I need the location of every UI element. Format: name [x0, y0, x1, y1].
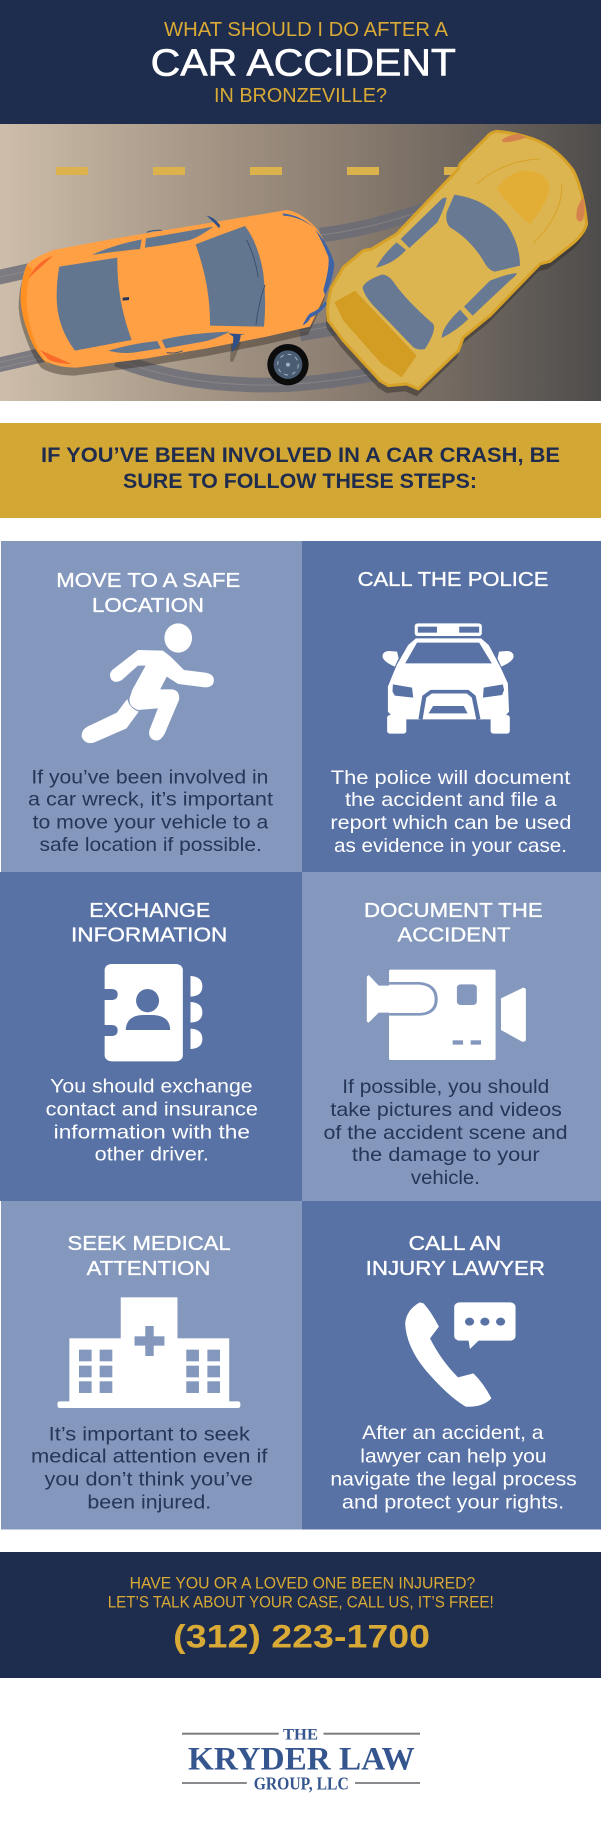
text: document the accident: If possible, you should: [342, 1076, 549, 1098]
text: exchange information: other driver.: [95, 1143, 209, 1165]
text: exchange information: contact and insurance: [46, 1098, 258, 1120]
text: document the accident: [324, 1076, 568, 1189]
panel: call an injury lawyer: [302, 1201, 601, 1530]
text: move to a safe location: a car wreck, it’s important: [28, 788, 274, 810]
text: call the police: report which can be used: [330, 812, 571, 834]
heading: document the accident: DOCUMENT THE: [364, 899, 543, 922]
banner: follow these steps: IF YOU’VE BEEN INVOLVED IN A CAR CRASH, BE: [41, 444, 560, 467]
text: call an injury lawyer: [330, 1422, 577, 1513]
text: seek medical attention: [31, 1423, 268, 1513]
banner: follow these steps: SURE TO FOLLOW THESE STEPS:: [123, 470, 477, 493]
heading: document the accident: [364, 899, 543, 947]
call to action text: HAVE YOU OR A LOVED ONE BEEN INJURED?: [130, 1575, 475, 1593]
heading: exchange information: INFORMATION: [71, 924, 227, 947]
call to action panel: [0, 1552, 601, 1678]
header panel: [0, 0, 601, 124]
heading: seek medical attention: SEEK MEDICAL: [68, 1232, 231, 1255]
heading: call an injury lawyer: INJURY LAWYER: [366, 1257, 545, 1280]
logo: the kryder law group: THE: [283, 1727, 318, 1744]
text: seek medical attention: been injured.: [87, 1491, 211, 1513]
heading: move to a safe location: MOVE TO A SAFE: [56, 569, 240, 592]
text: exchange information: information with the: [54, 1121, 250, 1143]
phone number: (312) 223-1700: [173, 1618, 430, 1654]
title: WHAT SHOULD I DO AFTER A: [164, 19, 449, 41]
text: seek medical attention: you don’t think you’ve: [44, 1468, 253, 1490]
text: exchange information: You should exchange: [50, 1075, 253, 1097]
panel: move to a safe location: [1, 541, 302, 872]
logo: the kryder law group: [182, 1727, 420, 1793]
icon: video camera: [367, 970, 526, 1060]
logo: the kryder law group: KRYDER LAW: [188, 1741, 415, 1777]
icon: contact book: [103, 964, 202, 1061]
icon: hospital: [57, 1297, 240, 1408]
text: call the police: the accident and file a: [345, 789, 557, 811]
panel: exchange information: [0, 872, 302, 1201]
panel: document the accident: [302, 872, 601, 1201]
text: move to a safe location: [28, 766, 274, 856]
heading: call an injury lawyer: [366, 1232, 545, 1280]
skid marks: [0, 208, 430, 385]
hero illustration: car crash: [0, 124, 601, 401]
text: document the accident: the damage to your: [352, 1144, 540, 1166]
heading: seek medical attention: [68, 1232, 231, 1280]
text: call an injury lawyer: navigate the legal process: [330, 1468, 577, 1490]
orange car: [19, 210, 334, 376]
text: move to a safe location: If you’ve been involved in: [31, 766, 268, 788]
call to action text: LET’S TALK ABOUT YOUR CASE, CALL US, IT’S FREE!: [108, 1593, 494, 1611]
text: seek medical attention: It’s important to seek: [49, 1423, 250, 1445]
banner: follow these steps: [0, 423, 601, 518]
heading: seek medical attention: ATTENTION: [87, 1257, 210, 1280]
yellow car: [326, 131, 587, 396]
title: CAR ACCIDENT: [151, 43, 456, 85]
text: seek medical attention: medical attention even if: [31, 1445, 268, 1467]
text: document the accident: take pictures and videos: [330, 1099, 562, 1121]
text: call the police: The police will document: [331, 767, 571, 789]
text: call an injury lawyer: lawyer can help you: [360, 1445, 547, 1467]
icon: running person: [82, 623, 214, 743]
heading: document the accident: ACCIDENT: [398, 924, 511, 947]
logo: the kryder law group: GROUP, LLC: [254, 1773, 349, 1793]
icon: phone and speech bubble: [405, 1302, 516, 1407]
text: call an injury lawyer: and protect your rights.: [342, 1491, 564, 1513]
heading: move to a safe location: [56, 569, 240, 617]
road dashes: [56, 167, 464, 175]
title: [151, 19, 456, 107]
heading: call the police: CALL THE POLICE: [358, 568, 548, 591]
text: document the accident: vehicle.: [411, 1167, 480, 1189]
heading: exchange information: EXCHANGE: [89, 899, 210, 922]
heading: exchange information: [71, 899, 227, 947]
heading: call an injury lawyer: CALL AN: [409, 1232, 501, 1255]
call to action text: [108, 1575, 494, 1611]
icon: police car: [383, 623, 514, 734]
text: call the police: [330, 767, 571, 857]
text: exchange information: [46, 1075, 258, 1165]
title: IN BRONZEVILLE?: [214, 85, 387, 107]
text: move to a safe location: to move your vehicle to a: [33, 811, 268, 833]
panel: seek medical attention: [1, 1201, 302, 1530]
text: move to a safe location: safe location if possible.: [40, 834, 262, 856]
text: call the police: as evidence in your case.: [334, 835, 567, 857]
text: document the accident: of the accident scene and: [324, 1122, 568, 1144]
text: call an injury lawyer: After an accident, a: [362, 1422, 544, 1444]
loose wheel: [267, 344, 309, 385]
panel: call the police: [302, 541, 601, 872]
heading: move to a safe location: LOCATION: [92, 594, 204, 617]
